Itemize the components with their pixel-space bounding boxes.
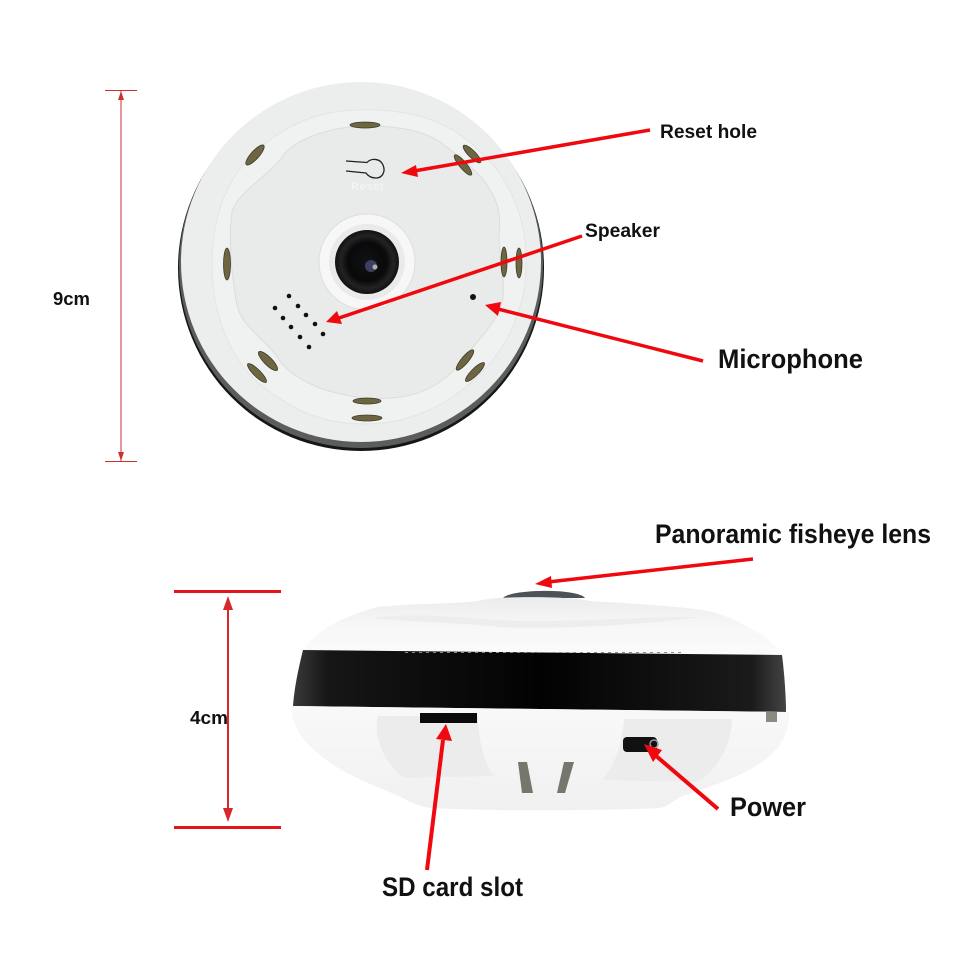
reset key icon <box>346 159 384 178</box>
SD card slot <box>420 713 477 723</box>
top shell shadow <box>372 615 700 628</box>
microphone hole <box>470 294 476 300</box>
4cm label: 4cm <box>190 708 228 728</box>
label: panoramic fisheye lens: Panoramic fisheye lens <box>655 519 931 549</box>
label: speaker: Speaker <box>585 221 661 242</box>
power port <box>623 737 658 752</box>
vents <box>518 762 574 793</box>
arrow: reset hole <box>401 130 650 177</box>
top view camera <box>178 82 544 451</box>
label: reset hole: Reset hole <box>660 122 757 143</box>
speaker holes <box>273 294 325 349</box>
inner plate <box>230 126 503 399</box>
label: power: Power <box>730 792 806 822</box>
reset label: Reset <box>351 181 383 193</box>
arrow: SD card slot <box>427 724 452 870</box>
raised ring layer <box>212 110 526 424</box>
dimension: 4cm <box>174 592 281 828</box>
lens dome <box>503 591 585 598</box>
side tab <box>766 712 777 722</box>
side view camera <box>292 591 789 810</box>
black band <box>293 650 786 712</box>
arrow: speaker <box>326 236 582 324</box>
lens <box>319 214 415 310</box>
lower housing <box>292 706 789 810</box>
arrow: power <box>644 744 718 809</box>
ventilation slots <box>224 122 522 421</box>
label: SD card slot: SD card slot <box>382 872 523 902</box>
arrow: microphone <box>485 302 703 361</box>
camera outer body <box>178 82 544 451</box>
arrow: fisheye lens <box>535 559 753 588</box>
lower recesses <box>377 716 732 782</box>
top shell <box>303 597 782 656</box>
band edge specks <box>405 652 685 654</box>
9cm label: 9cm <box>53 289 90 309</box>
label: microphone: Microphone <box>718 344 863 374</box>
dimension: 9cm <box>53 90 137 462</box>
